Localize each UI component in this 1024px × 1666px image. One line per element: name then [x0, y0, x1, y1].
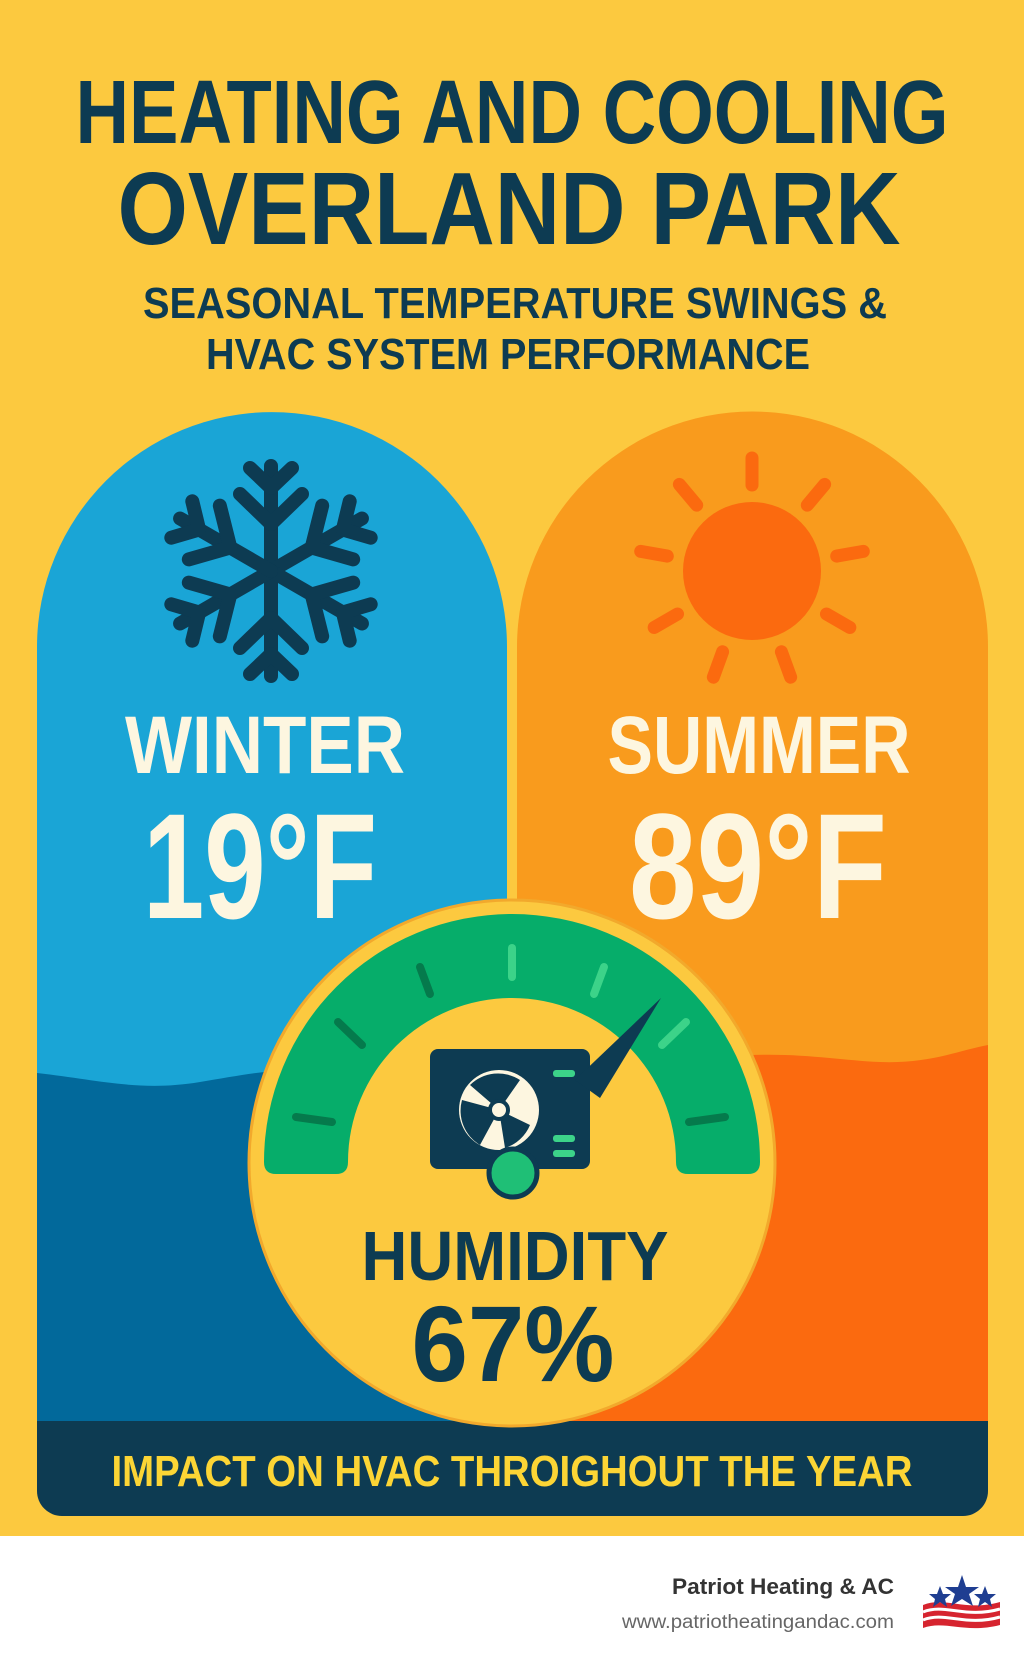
panel: summer [517, 412, 988, 1430]
footer brand: Patriot Heating & AC [672, 1574, 894, 1599]
panel: winter [37, 412, 507, 1430]
label: winter: WINTER [125, 700, 405, 791]
label: summer: SUMMER [608, 700, 910, 791]
icon: hvac unit [430, 1049, 590, 1197]
title [76, 63, 948, 266]
gauge needle [575, 998, 661, 1098]
subtitle [143, 279, 887, 379]
gauge ticks [296, 967, 725, 1122]
label: humidity: HUMIDITY [362, 1217, 668, 1295]
humidity gauge circle [249, 900, 775, 1426]
footer brand: www.patriotheatingandac.com [621, 1612, 894, 1633]
subtitle: SEASONAL TEMPERATURE SWINGS & [143, 279, 887, 328]
value: 67%: 67% [412, 1283, 614, 1404]
value: 19F: 19°F [143, 782, 377, 950]
footer brand [621, 1574, 894, 1633]
icon: sun [641, 458, 863, 677]
gauge arc [264, 914, 760, 1174]
subtitle: HVAC SYSTEM PERFORMANCE [206, 330, 810, 379]
icon: snowflake [165, 466, 377, 676]
title: OVERLAND PARK [118, 151, 900, 266]
icon: flag stars [923, 1575, 1000, 1628]
bottom band [37, 1421, 988, 1516]
bottom band: IMPACT ON HVAC THROIGHOUT THE YEAR [112, 1447, 912, 1496]
value: 89F: 89°F [629, 782, 887, 950]
